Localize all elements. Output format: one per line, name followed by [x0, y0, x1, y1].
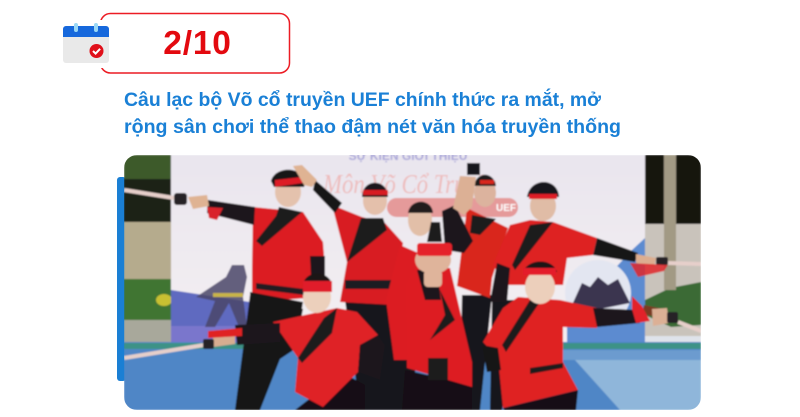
- photo: martial arts club performance: [124, 148, 701, 410]
- banner text: [322, 148, 518, 217]
- accent bar: [117, 177, 126, 381]
- performer: right standing: [490, 182, 668, 410]
- performer: left standing: [174, 165, 325, 410]
- performer: female behind center: [386, 202, 434, 410]
- banner text: SỰ KIỆN GIỚI THIỆU: [349, 148, 467, 163]
- title: [124, 87, 621, 138]
- performer: kneeling right: [482, 262, 678, 410]
- date badge: [100, 14, 290, 73]
- ropes: [124, 190, 701, 358]
- performer: center front: [402, 163, 480, 410]
- performer: behind center right: [457, 175, 508, 410]
- performer: kneeling left: [203, 274, 385, 410]
- title: rộng sân chơi thể thao đậm nét văn hóa truyền thống: [124, 116, 621, 138]
- performer: second standing: [313, 180, 403, 410]
- banner text: Môn Võ Cổ Truyền: [322, 169, 497, 199]
- date text: 2/10: [163, 25, 232, 62]
- title: Câu lạc bộ Võ cổ truyền UEF chính thức ra mắt, mở: [124, 87, 601, 111]
- icon: calendar: [63, 20, 112, 68]
- banner text: UEF: [496, 203, 516, 214]
- photo background: [124, 155, 701, 410]
- banner figure: [196, 265, 247, 327]
